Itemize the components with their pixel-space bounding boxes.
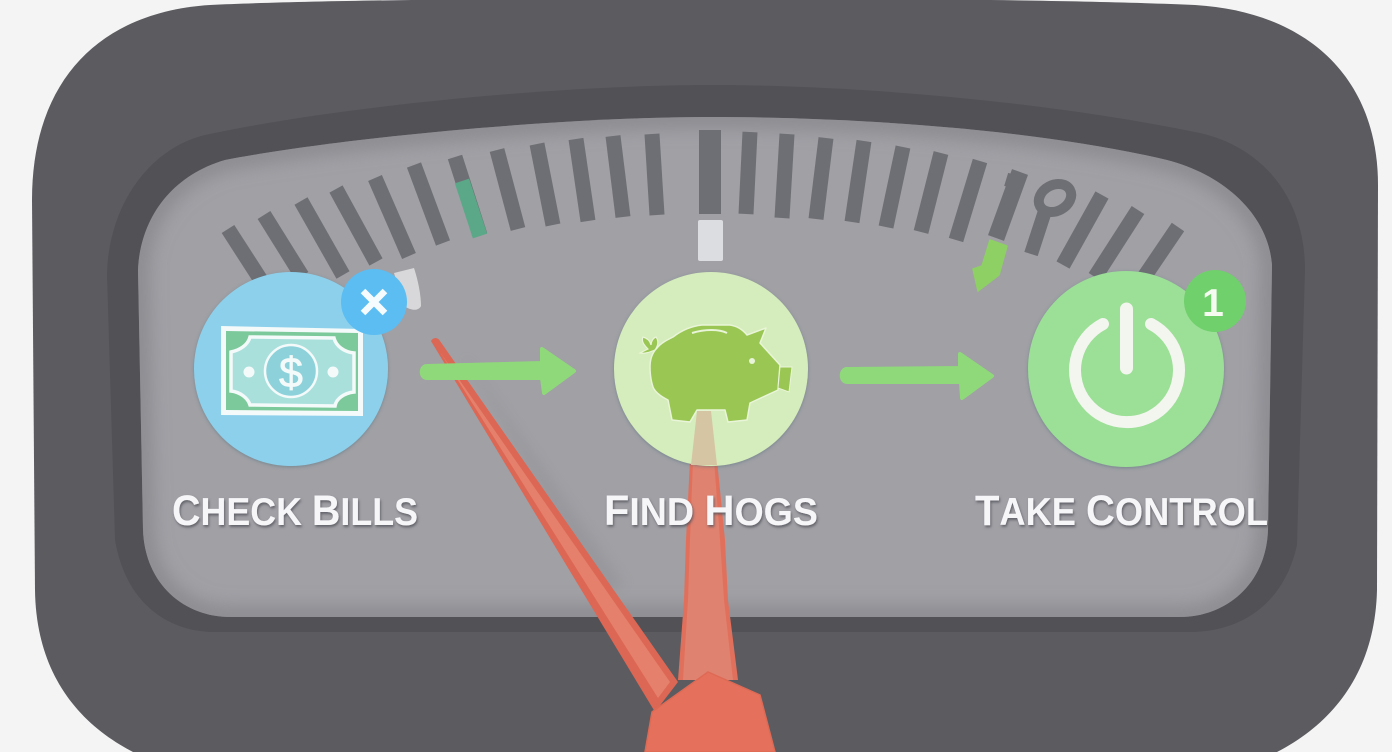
gauge tick marks <box>228 130 1178 288</box>
icon: power symbol <box>1075 309 1179 422</box>
gauge face <box>138 117 1272 617</box>
label: check bills: CHECK BILLS <box>172 487 418 535</box>
label: find hogs: FIND HOGS <box>604 487 818 535</box>
badge: x mark <box>341 269 407 335</box>
badge: number 1 <box>1184 270 1246 332</box>
white centre marker <box>698 220 723 261</box>
circle: check bills <box>194 272 388 466</box>
badge: number 1: 1 <box>1202 282 1224 325</box>
step 3: take control <box>1028 270 1246 467</box>
needle seen through circle <box>691 411 717 465</box>
circle: take control <box>1028 271 1224 467</box>
icon: dollar bill: $ <box>279 349 303 397</box>
needle shadow <box>462 352 625 595</box>
circle: find hogs <box>614 272 808 466</box>
arrow: check bills to find hogs <box>422 349 574 393</box>
white marker behind badge <box>394 268 421 310</box>
needle hub <box>645 672 775 752</box>
icon: piggy bank <box>640 325 792 422</box>
arrow: find hogs to take control <box>842 354 992 398</box>
gauge inner bezel ring <box>107 85 1305 632</box>
label: take control: TAKE CONTROL <box>975 487 1268 535</box>
red needle, vertical <box>678 460 738 680</box>
red needle, angled <box>431 338 678 712</box>
green highlighted tick <box>462 181 480 236</box>
step 2: find hogs <box>614 272 808 466</box>
icon: dollar bill <box>221 326 363 416</box>
small green arrow pointing down <box>973 240 1007 291</box>
step 1: check bills <box>194 269 407 466</box>
